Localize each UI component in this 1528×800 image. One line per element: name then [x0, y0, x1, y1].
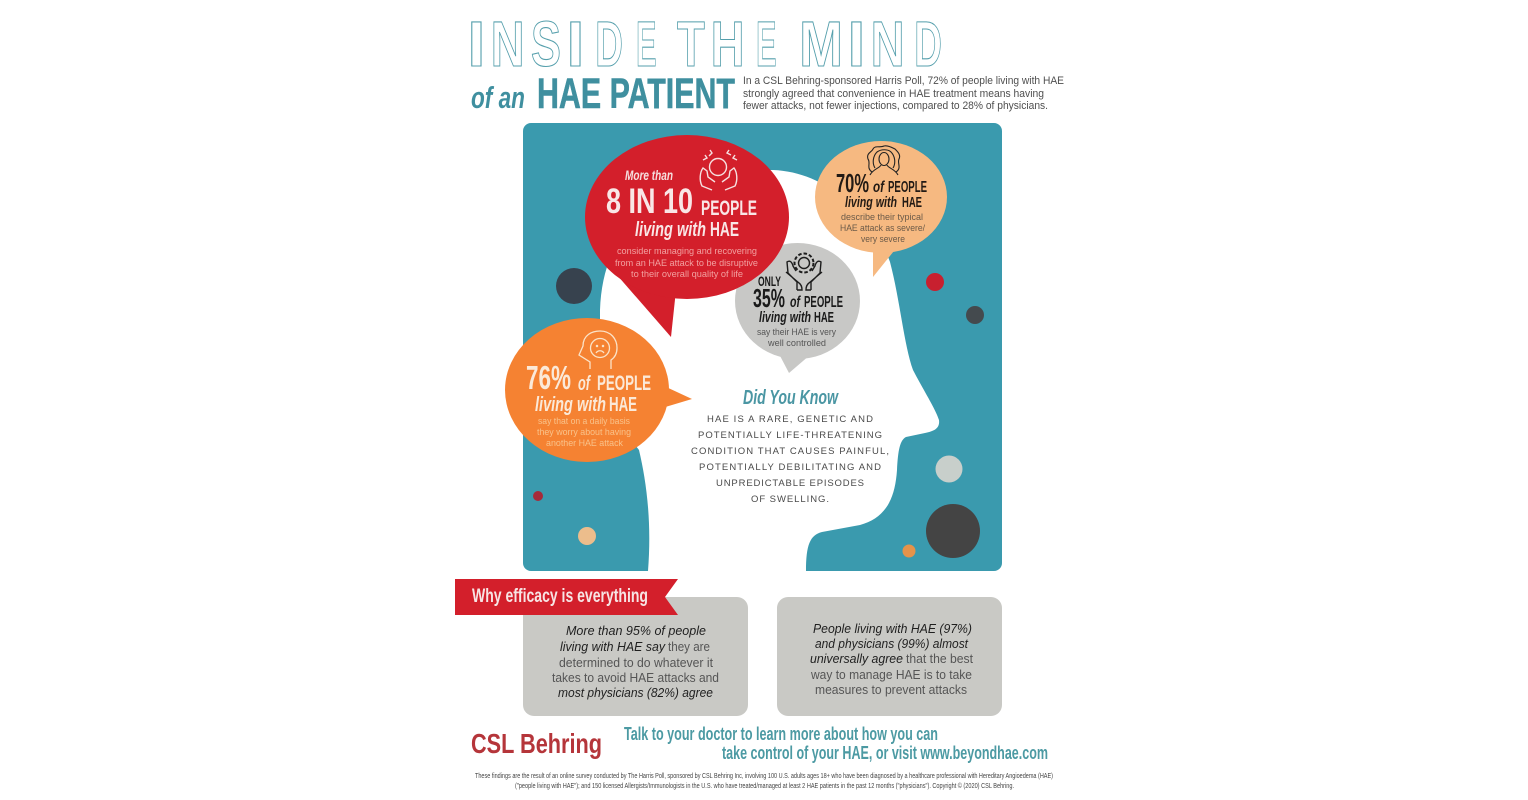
bubble: 70% severe attacks: describe their typical [841, 212, 923, 223]
panel: efficacy box right: way to manage HAE is to take [810, 668, 972, 682]
panel: efficacy box right: People living with HAE (97%) [813, 622, 972, 636]
title: inside the mind: I [566, 8, 584, 80]
bubble: more than 8 in 10: living with [635, 219, 706, 241]
title: inside the mind: I [468, 8, 485, 80]
did you know heading: Did You Know [743, 387, 839, 409]
logo: CSL Behring: CSL Behring [471, 728, 602, 759]
bubble: more than 8 in 10: to their overall quality of life [631, 269, 743, 280]
title: inside the mind [468, 8, 942, 80]
panel: efficacy box left: determined to do whatever it [559, 656, 714, 670]
title: inside the mind: E [756, 8, 776, 80]
bubble: 76% daily worry [505, 318, 692, 462]
intro paragraph: fewer attacks, not fewer injections, compared to 28% of physicians. [743, 100, 1048, 112]
title: inside the mind: T [677, 8, 705, 80]
panel: efficacy box left: More than 95% of people [566, 624, 706, 638]
did you know text: HAE IS A RARE, GENETIC AND [707, 414, 873, 425]
bubble: 35% well controlled: well controlled [767, 338, 826, 349]
bubble: 70% severe attacks: HAE [902, 194, 922, 211]
footnote: These findings are the result of an online survey conducted by The Harris Poll, sponsored by CSL Behring Inc, involving 100 U.S. adults ages 18+ who have been diagnosed by a healthcare professional with Hereditary Angioedema (HAE) [475, 773, 1053, 780]
decorative circles [533, 268, 984, 558]
bubble: 76% daily worry: HAE [609, 394, 637, 416]
panel: efficacy box left: they are [668, 640, 710, 654]
panel: efficacy box right: and physicians (99%) almost [815, 637, 969, 651]
bubble: more than 8 in 10: More than [625, 167, 673, 183]
call to action: Talk to your doctor to learn more about how you can [624, 724, 938, 744]
bubble: more than 8 in 10: from an HAE attack to be disruptive [615, 258, 758, 269]
icon: sad head [579, 331, 617, 369]
title: inside the mind: D [914, 8, 942, 80]
call to action: take control of your HAE, or visit www.beyondhae.com [722, 743, 1048, 763]
bubble: 70% severe attacks: HAE attack as severe/ [840, 223, 925, 234]
did you know text [691, 414, 889, 505]
title: inside the mind: N [491, 8, 524, 80]
bubble: 35% well controlled: ONLY [758, 273, 781, 289]
subtitle: of an HAE patient: of an [471, 80, 525, 115]
did you know text: UNPREDICTABLE EPISODES [716, 478, 864, 489]
bubble: more than 8 in 10 [585, 135, 789, 337]
bubble: more than 8 in 10: consider managing and recovering [617, 246, 757, 257]
head silhouette [600, 170, 939, 571]
did you know text: POTENTIALLY LIFE-THREATENING [698, 430, 882, 441]
did you know text: OF SWELLING. [751, 494, 829, 505]
bubble: 76% daily worry: they worry about having [537, 427, 631, 438]
bubble: 76% daily worry: another HAE attack [546, 438, 623, 449]
footnote: ("people living with HAE"); and 150 licensed Allergists/Immunologists in the U.S. who have treated/managed at least 2 HAE patients in the past 12 months ("physicians"). Copyright © (2020) CSL Behring. [515, 782, 1014, 790]
panel: efficacy box left: living with HAE say [560, 640, 666, 654]
panel: efficacy box left [523, 597, 748, 716]
bubble: 35% well controlled: 35% [753, 283, 785, 313]
footnote [475, 773, 1053, 790]
panel: efficacy box right: measures to prevent attacks [815, 683, 967, 697]
bubble: 35% well controlled: living with [759, 309, 811, 326]
intro paragraph: strongly agreed that convenience in HAE treatment means having [743, 88, 1044, 100]
banner: why efficacy is everything [455, 579, 678, 615]
bubble: more than 8 in 10: PEOPLE [701, 197, 757, 220]
panel: efficacy box right [777, 597, 1002, 716]
call to action [624, 724, 1048, 763]
intro paragraph [743, 75, 1064, 112]
bubble: 76% daily worry: of [578, 373, 591, 395]
bubble: 76% daily worry: living with [535, 394, 606, 416]
bubble: 35% well controlled: HAE [814, 309, 834, 326]
bubble: 70% severe attacks: of [873, 179, 885, 196]
bubble: 70% severe attacks: 70% [836, 168, 869, 198]
title: inside the mind: N [871, 8, 904, 80]
panel: efficacy box left: takes to avoid HAE attacks and [552, 671, 719, 685]
bubble: 70% severe attacks: PEOPLE [888, 179, 927, 196]
title: inside the mind: S [531, 8, 561, 80]
title: inside the mind: I [848, 8, 865, 80]
panel: efficacy box right: universally agree [810, 652, 903, 666]
did you know text: POTENTIALLY DEBILITATING AND [699, 462, 881, 473]
bubble: more than 8 in 10: 8 IN 10 [606, 182, 693, 221]
bubble: 76% daily worry: 76% [526, 359, 571, 396]
panel: efficacy box right: that the best [906, 652, 973, 666]
did you know text: CONDITION THAT CAUSES PAINFUL, [691, 446, 889, 457]
bubble: 70% severe attacks: very severe [861, 234, 905, 245]
bubble: 35% well controlled [735, 243, 860, 373]
bubble: 76% daily worry: say that on a daily basis [538, 416, 630, 427]
title: inside the mind: M [799, 8, 843, 80]
title: inside the mind: D [595, 8, 623, 80]
icon: head in hands [700, 150, 737, 190]
bubble: 35% well controlled: PEOPLE [804, 294, 843, 311]
bubble: more than 8 in 10: HAE [710, 219, 739, 241]
panel: teal background [523, 123, 1002, 571]
bubble: 70% severe attacks [815, 141, 947, 277]
icon: hands holding gear [786, 254, 822, 290]
subtitle: of an HAE patient [471, 70, 735, 118]
bubble: 70% severe attacks: living with [845, 194, 897, 211]
banner: why efficacy is everything: Why efficacy is everything [472, 586, 648, 607]
title: inside the mind: E [636, 8, 656, 80]
bubble: 35% well controlled: of [790, 294, 801, 311]
bubble: 76% daily worry: PEOPLE [597, 372, 651, 395]
subtitle: of an HAE patient: HAE PATIENT [537, 70, 735, 118]
title: inside the mind: H [711, 8, 744, 80]
intro paragraph: In a CSL Behring-sponsored Harris Poll, 72% of people living with HAE [743, 75, 1064, 87]
panel: efficacy box left: most physicians (82%) agree [558, 686, 713, 700]
bubble: 35% well controlled: say their HAE is very [757, 327, 836, 338]
icon: person under stress [868, 146, 900, 175]
